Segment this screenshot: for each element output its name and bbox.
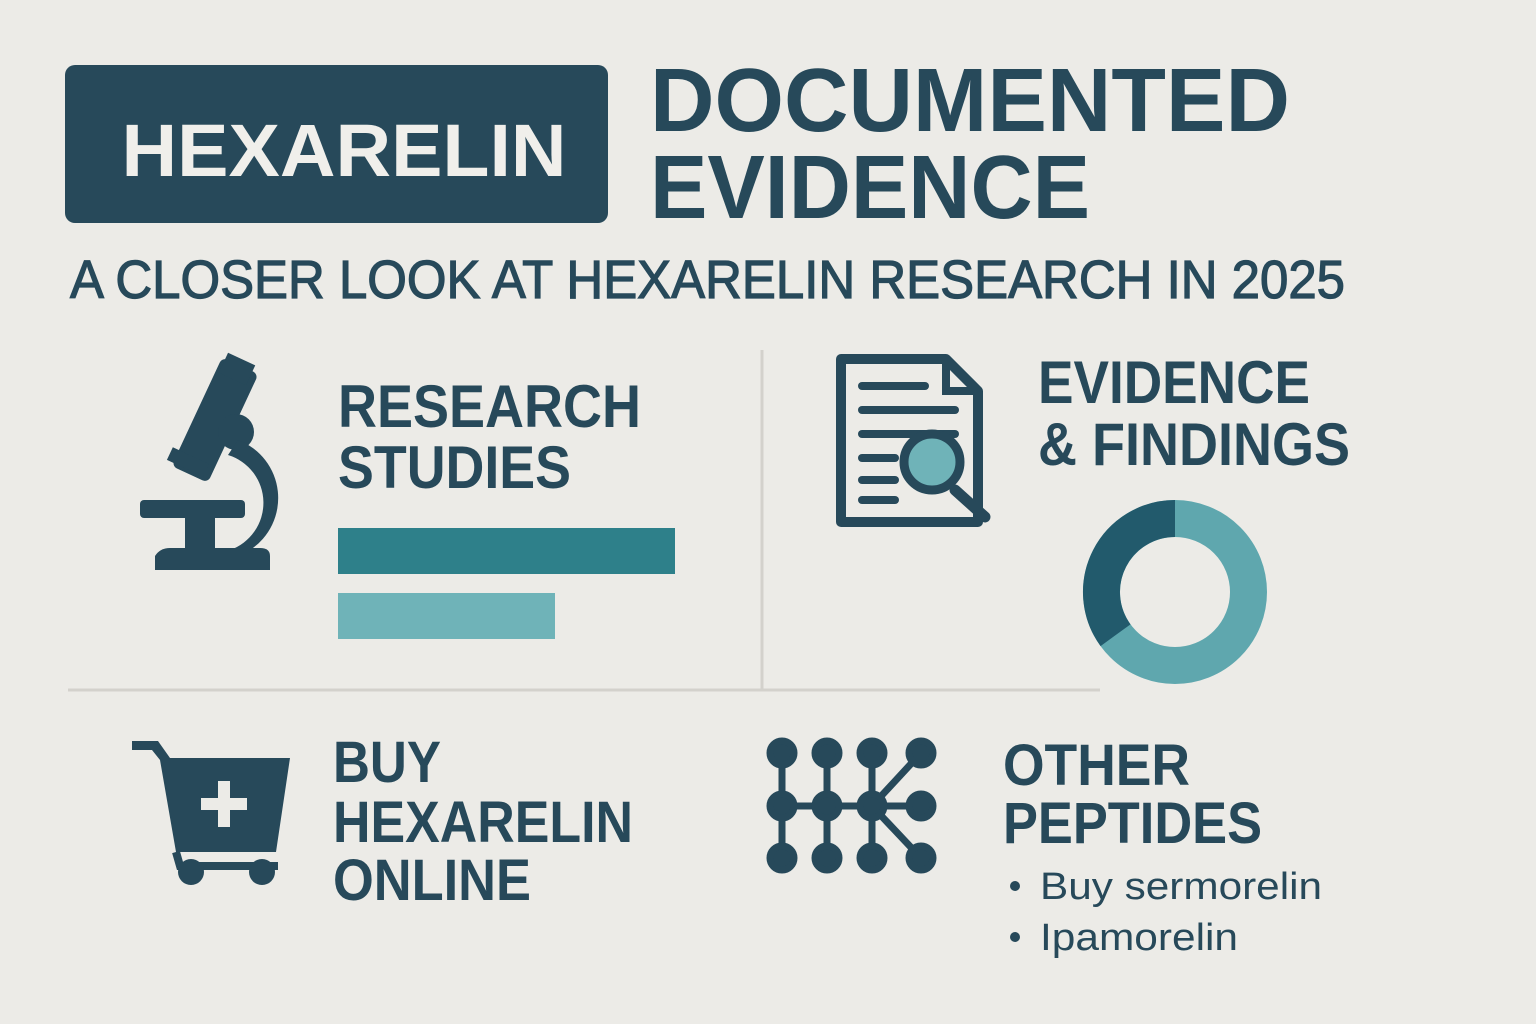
title badge: HEXARELIN <box>122 109 566 192</box>
subtitle: A CLOSER LOOK AT HEXARELIN RESEARCH IN 2025 <box>70 250 1345 310</box>
icon: microscope <box>140 353 278 570</box>
heading: evidence & findings: EVIDENCE <box>1038 349 1310 416</box>
donut chart <box>1101 518 1248 666</box>
heading: research studies: RESEARCH <box>338 373 641 440</box>
heading: research studies: STUDIES <box>338 434 571 501</box>
heading: evidence & findings <box>1038 349 1350 478</box>
heading: evidence & findings: & FINDINGS <box>1038 411 1350 478</box>
title: documented evidence: EVIDENCE <box>650 138 1090 238</box>
heading: buy hexarelin online: ONLINE <box>333 848 531 913</box>
heading: research studies <box>338 373 641 501</box>
heading: other peptides <box>1003 733 1262 856</box>
list: peptide links: Buy sermorelin <box>1040 866 1322 908</box>
icon: peptide network <box>770 741 933 870</box>
panel: evidence & findings <box>841 349 1350 666</box>
bar chart <box>338 528 675 639</box>
icon: shopping cart <box>132 741 290 885</box>
title: documented evidence <box>650 51 1290 238</box>
list: peptide links <box>1010 866 1322 959</box>
panel: other peptides <box>770 733 1322 959</box>
list: peptide links: Ipamorelin <box>1040 917 1238 959</box>
panel: buy hexarelin online <box>132 730 633 913</box>
heading: other peptides: OTHER <box>1003 733 1190 798</box>
title: documented evidence: DOCUMENTED <box>650 51 1290 151</box>
icon: document with magnifier <box>841 359 985 522</box>
heading: buy hexarelin online <box>333 730 633 913</box>
title badge <box>65 65 608 223</box>
heading: buy hexarelin online: BUY <box>333 730 441 795</box>
heading: buy hexarelin online: HEXARELIN <box>333 790 633 855</box>
panel: research studies <box>140 353 675 639</box>
heading: other peptides: PEPTIDES <box>1003 791 1262 856</box>
